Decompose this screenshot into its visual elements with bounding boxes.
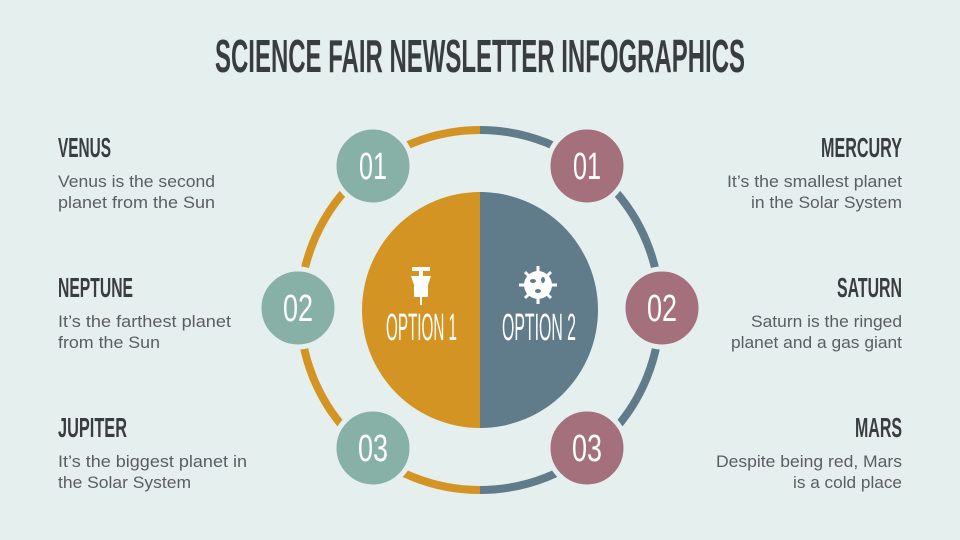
icon: virus [519, 266, 557, 304]
text block: saturn: SATURN [837, 272, 902, 303]
text block: jupiter [58, 412, 247, 492]
text block: neptune [58, 272, 231, 352]
numbers: 01 [573, 146, 601, 188]
center circle: OPTION 1 [386, 307, 457, 349]
text block: neptune: NEPTUNE [58, 272, 133, 303]
text block: venus: planet from the Sun [58, 193, 215, 212]
text block: mars: MARS [855, 412, 902, 443]
text block: venus: VENUS [58, 132, 111, 163]
text block: mercury [727, 132, 902, 212]
center circle [362, 192, 598, 428]
numbers: 01 [359, 146, 387, 188]
text block: saturn: Saturn is the ringed [751, 312, 902, 331]
text block: mars: Despite being red, Mars [716, 452, 902, 471]
text block: mars [716, 412, 902, 492]
text block: saturn: planet and a gas giant [731, 333, 902, 352]
icon: syringe [411, 267, 431, 305]
text block: venus: Venus is the second [58, 172, 215, 191]
text block: mercury: It’s the smallest planet [727, 172, 902, 191]
text block: mars: is a cold place [793, 473, 902, 492]
numbers: 03 [572, 428, 602, 470]
text block: saturn [731, 272, 902, 352]
text block: jupiter: JUPITER [58, 412, 127, 443]
text block: venus [58, 132, 215, 212]
text block: mercury: MERCURY [821, 132, 902, 163]
text block: neptune: from the Sun [58, 333, 160, 352]
ring [300, 130, 660, 490]
text block: neptune: It’s the farthest planet [58, 312, 231, 331]
number circles right [548, 127, 701, 487]
numbers: 02 [283, 288, 313, 330]
number circles left [259, 127, 412, 487]
text block: mercury: in the Solar System [751, 193, 902, 212]
numbers: 03 [358, 428, 388, 470]
text block: jupiter: It’s the biggest planet in [58, 452, 247, 471]
numbers [283, 146, 677, 470]
text block: jupiter: the Solar System [58, 473, 191, 492]
numbers: 02 [647, 288, 677, 330]
center circle: OPTION 2 [502, 307, 576, 349]
